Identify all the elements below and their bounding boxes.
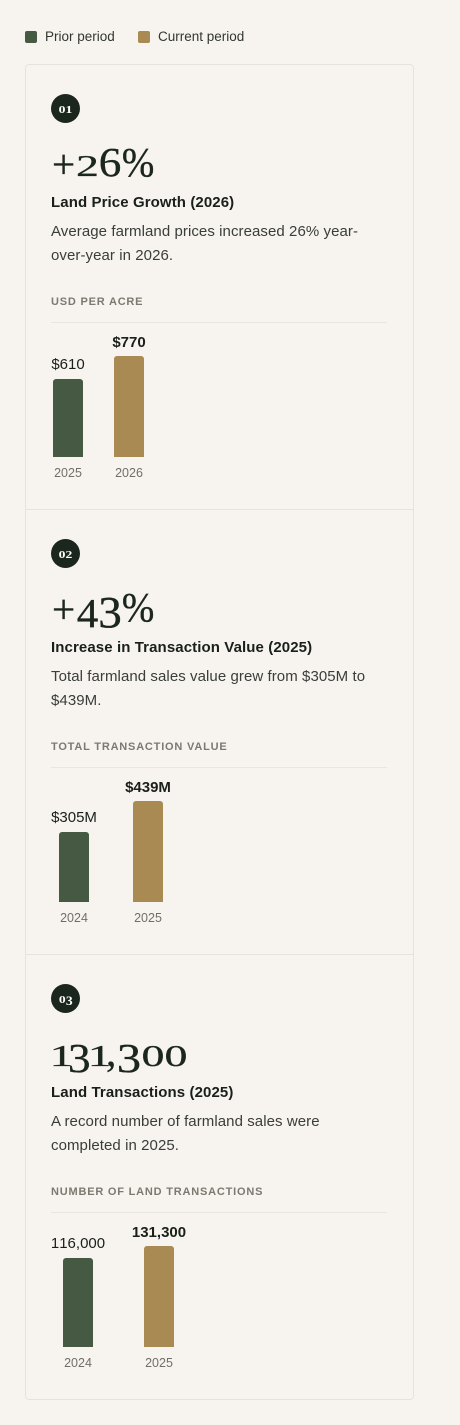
stat: 131,300: 3 <box>117 1035 141 1081</box>
value label $439M: $439M <box>125 779 171 796</box>
bar 2024 <box>63 1258 93 1347</box>
number badge 02 <box>51 539 80 568</box>
chart label: NUMBER OF LAND TRANSACTIONS <box>51 1186 263 1198</box>
year label 2024: 2024 <box>60 911 88 925</box>
description: Total farmland sales value grew from $305M to <box>51 668 365 685</box>
stat: 131,300: 1 <box>50 1038 73 1073</box>
legend label: prior period: Prior period <box>45 29 115 44</box>
value label $770: $770 <box>112 334 146 351</box>
chart label: USD PER ACRE <box>51 296 143 308</box>
value label $610: $610 <box>51 356 85 373</box>
description: Average farmland prices increased 26% year- <box>51 223 358 240</box>
stat: +43%: % <box>122 584 154 630</box>
panel: land price growth <box>26 65 413 510</box>
legend swatch: current period <box>138 31 150 43</box>
description <box>51 1113 320 1154</box>
legend label: current period: Current period <box>158 29 244 44</box>
year label 2025: 2025 <box>145 1356 173 1370</box>
number badge 03 <box>51 984 80 1013</box>
stat: +26%: 2 <box>76 148 99 183</box>
bar chart <box>51 334 146 480</box>
card container <box>25 64 414 1400</box>
stat: +43%: + <box>52 586 75 632</box>
panel: transaction value <box>26 510 413 955</box>
description <box>51 223 358 264</box>
stat: +43%: 4 <box>77 590 98 636</box>
number badge 01: 01 <box>59 103 72 115</box>
stat: 131,300: 1 <box>88 1038 111 1073</box>
heading: land transactions: Land Transactions (2025) <box>51 1084 233 1101</box>
legend swatch: prior period <box>25 31 37 43</box>
number badge 01 <box>51 94 80 123</box>
panel: land transactions <box>50 984 387 1370</box>
chart label: TOTAL TRANSACTION VALUE <box>51 741 227 753</box>
year label 2025: 2025 <box>54 466 82 480</box>
description: over-year in 2026. <box>51 247 173 264</box>
bar 2025 <box>133 801 163 902</box>
year label 2025: 2025 <box>134 911 162 925</box>
heading: transaction value: Increase in Transaction Value (2025) <box>51 639 312 656</box>
number badge 03: 3 <box>65 993 72 1008</box>
stat: +43% <box>52 584 154 637</box>
bar chart <box>51 779 171 925</box>
stat: 131,300 <box>50 1029 187 1081</box>
description: A record number of farmland sales were <box>51 1113 320 1130</box>
stat: +26%: 6 <box>99 139 121 185</box>
bar 2026 <box>114 356 144 457</box>
stat: 131,300: , <box>106 1029 116 1075</box>
number badge 02: 02 <box>59 548 72 560</box>
bar 2025 <box>144 1246 174 1347</box>
legend <box>25 29 244 44</box>
bar 2024 <box>59 832 89 902</box>
description: completed in 2025. <box>51 1137 179 1154</box>
stat: 131,300: 0 <box>165 1038 187 1073</box>
value label 131,300: 131,300 <box>132 1224 186 1241</box>
stat: +43%: 3 <box>98 587 122 637</box>
year label 2024: 2024 <box>64 1356 92 1370</box>
description <box>51 668 365 709</box>
stat: +26% <box>52 139 154 187</box>
stat: 131,300: 3 <box>68 1035 91 1081</box>
description: $439M. <box>51 692 101 709</box>
heading: land price growth: Land Price Growth (2026) <box>51 194 234 211</box>
bar chart <box>51 1224 186 1370</box>
stat: +26%: + <box>52 141 75 187</box>
year label 2026: 2026 <box>115 466 143 480</box>
stat: 131,300: 0 <box>142 1038 164 1073</box>
value label $305M: $305M <box>51 809 97 826</box>
value label 116,000: 116,000 <box>51 1235 105 1252</box>
stat: +26%: % <box>122 139 154 185</box>
bar 2025 <box>53 379 83 457</box>
number badge 03: 0 <box>59 993 66 1005</box>
